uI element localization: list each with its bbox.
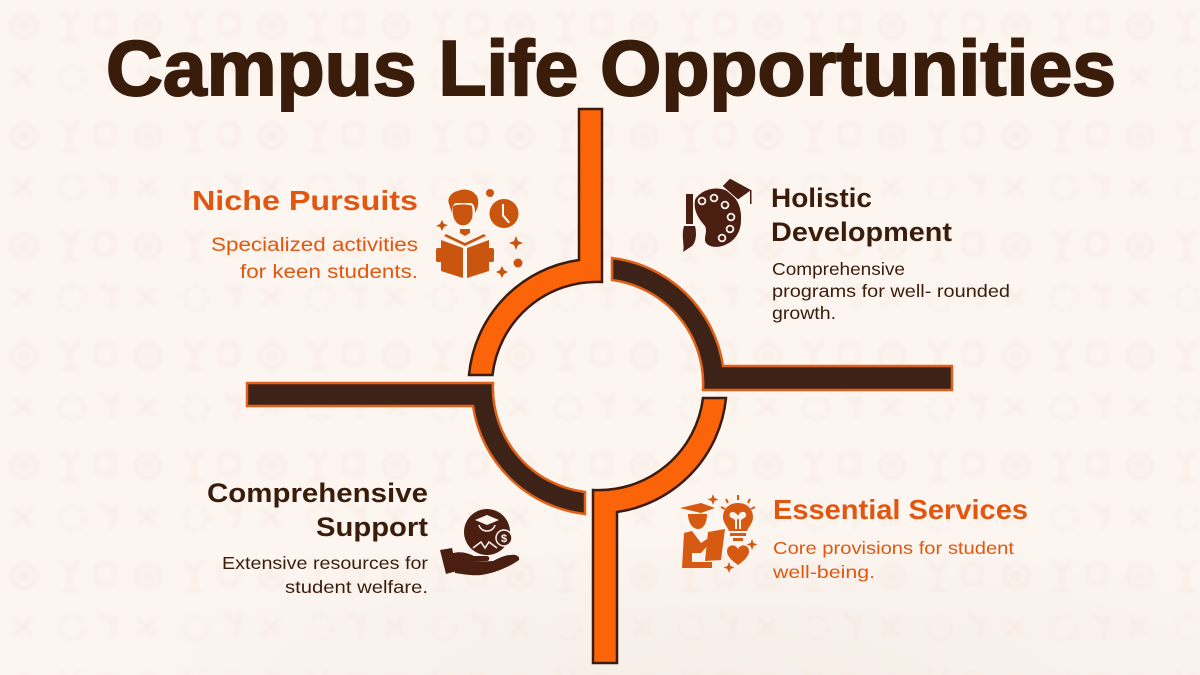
panel: holistic development	[683, 178, 1010, 323]
text: essential services description: well-being.	[772, 562, 875, 582]
text: holistic development description: Comprehensive	[772, 259, 905, 279]
title: Campus Life Opportunities	[106, 24, 1116, 112]
heading: niche pursuits: Niche Pursuits	[192, 185, 418, 216]
text: essential services description: Core provisions for student	[773, 538, 1014, 558]
heading: comprehensive support: Support	[316, 512, 428, 542]
heading: holistic development: Holistic	[771, 183, 872, 213]
icon: graduate, bulb and heart	[680, 494, 758, 573]
text: niche pursuits description: for keen students.	[240, 262, 418, 283]
heading: essential services: Essential Services	[773, 494, 1028, 525]
icon: hand holding graduate	[440, 509, 519, 575]
text: holistic development description: programs for well- rounded	[772, 281, 1010, 301]
panel: comprehensive support	[207, 478, 519, 597]
icon: hand holding graduate: $	[501, 533, 507, 545]
arc: top-right brown segment	[612, 258, 952, 390]
heading: holistic development: Development	[771, 217, 952, 247]
icon: palette with brush and cap	[683, 178, 752, 252]
text: comprehensive support description: Extensive resources for	[222, 553, 428, 573]
panel: essential services	[680, 494, 1028, 582]
arc: top-left orange segment	[469, 109, 602, 375]
panel: niche pursuits	[192, 185, 523, 283]
text: comprehensive support description: student welfare.	[285, 577, 428, 597]
text: niche pursuits description: Specialized activities	[211, 235, 418, 256]
arc: bottom-left brown segment	[247, 383, 585, 514]
heading: comprehensive support: Comprehensive	[207, 478, 428, 508]
central cross diagram	[247, 109, 952, 663]
text: holistic development description: growth.	[772, 303, 836, 323]
arc: bottom-right orange segment	[593, 398, 726, 663]
icon: student reading with clock	[436, 189, 523, 278]
